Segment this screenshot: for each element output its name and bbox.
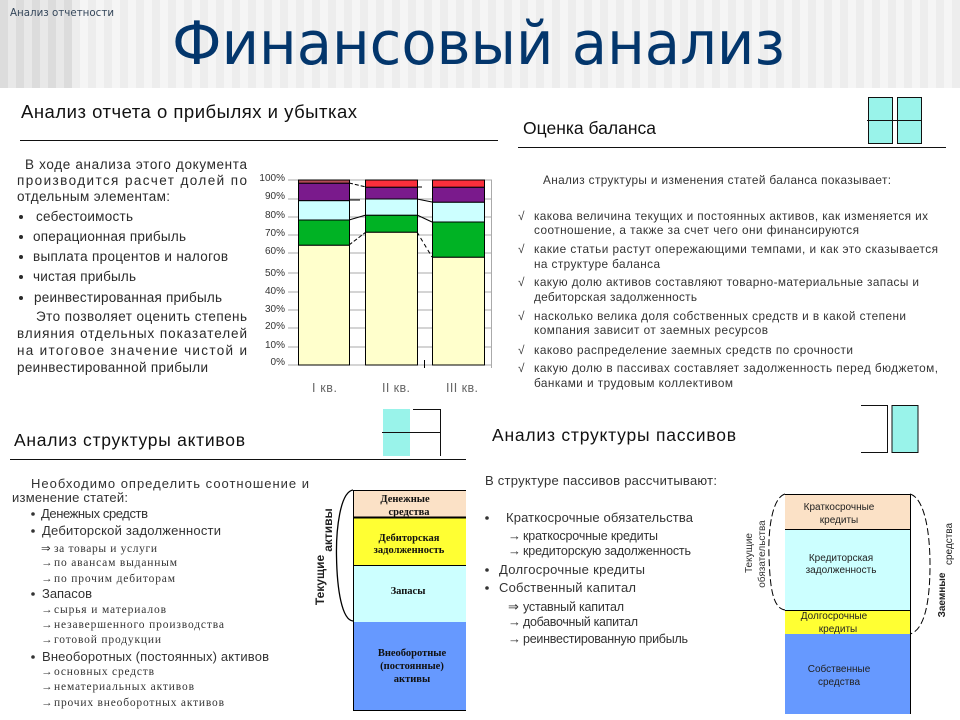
- asset stack labels: Дебиторская: [379, 533, 440, 544]
- text block: assets list: →: [41, 557, 52, 569]
- text block: assets list: Денежных средств: [41, 506, 148, 521]
- asset stack labels: (постоянные): [380, 661, 444, 672]
- rotated labels: current and borrowed: средства: [944, 523, 955, 565]
- liabilities stack labels: средства: [818, 677, 860, 688]
- text block: balance checklist: какую долю в пассивах составляет задолженность перед бюджетом,: [534, 361, 938, 375]
- panel: liabilities structure: [485, 406, 955, 714]
- liabilities stack labels: [801, 502, 876, 688]
- heading: income statement: Анализ отчета о прибылях и убытках: [21, 101, 358, 122]
- axis labels: 90%: [265, 191, 285, 202]
- liabilities stack labels: Долгосрочные: [801, 611, 868, 622]
- axis labels: 70%: [265, 228, 285, 239]
- text block: assets list: Необходимо определить соотношение и: [31, 476, 309, 491]
- text block: liabilities list: Долгосрочные кредиты: [499, 562, 645, 577]
- text block: assets list: →: [41, 634, 52, 646]
- asset stack labels: средства: [388, 507, 430, 518]
- asset stack labels: Внеоборотные: [378, 648, 447, 659]
- category labels: [312, 381, 478, 395]
- text block: balance checklist: [518, 173, 938, 390]
- text block: assets list: ⇒: [41, 543, 51, 555]
- text block: liabilities list: →: [508, 614, 521, 629]
- text block: assets list: →: [41, 573, 52, 585]
- liabilities stack labels: Краткосрочные: [804, 502, 875, 513]
- text block: balance checklist: какие статьи растут опережающими темпами, и как это сказывается: [534, 242, 938, 256]
- liabilities stack labels: кредиты: [819, 624, 857, 635]
- text block: assets list: Внеоборотных (постоянных) активов: [42, 649, 269, 664]
- title: Финансовый анализ: [172, 9, 785, 79]
- text block: liabilities list: ⇒: [508, 599, 519, 614]
- axis labels: 60%: [265, 246, 285, 257]
- text block: balance checklist: соотношение, а также за счет чего они финансируются: [534, 223, 859, 237]
- icon: liabilities cells: [861, 406, 918, 452]
- panel: income statement analysis: [17, 101, 498, 395]
- text block: balance checklist: √: [518, 343, 525, 357]
- liabilities stack labels: Кредиторская: [809, 553, 873, 564]
- text block: liabilities list: Краткосрочные обязательства: [506, 510, 694, 525]
- text block: assets list: [12, 476, 309, 709]
- asset stack labels: Денежные: [380, 494, 430, 505]
- axis labels: 40%: [265, 286, 285, 297]
- text block: liabilities list: Собственный капитал: [499, 580, 636, 595]
- axis labels: 100%: [259, 173, 285, 184]
- text block: liabilities list: кредиторскую задолженность: [523, 544, 691, 558]
- text block: income statement description: реинвестированной прибыли: [17, 360, 208, 375]
- axis labels: 50%: [265, 268, 285, 279]
- text block: assets list: прочих внеоборотных активов: [54, 697, 225, 709]
- bar: quarter 3: [432, 180, 484, 365]
- text block: liabilities list: В структуре пассивов рассчитывают:: [485, 473, 717, 488]
- text block: balance checklist: насколько велика доля собственных средств и в какой степени: [534, 309, 906, 323]
- panel: asset structure: [10, 409, 466, 710]
- diagram: liabilities stack: [744, 494, 955, 714]
- text block: assets list: нематериальных активов: [54, 681, 195, 693]
- text block: assets list: незавершенного производства: [54, 619, 224, 631]
- text block: assets list: →: [41, 604, 52, 616]
- category labels: I кв.: [312, 381, 337, 395]
- text block: liabilities list: реинвестированную прибыль: [523, 632, 688, 646]
- text block: assets list: →: [41, 619, 52, 631]
- text block: income statement description: [17, 157, 247, 375]
- text block: balance checklist: √: [518, 242, 525, 256]
- bar: quarter 1: [298, 180, 350, 365]
- asset stack labels: Запасы: [391, 586, 425, 597]
- category labels: II кв.: [382, 381, 410, 395]
- asset stack labels: [374, 494, 447, 685]
- axis labels: 10%: [265, 340, 285, 351]
- axis labels: [259, 173, 285, 368]
- text block: liabilities list: →: [508, 631, 521, 646]
- text block: liabilities list: →: [508, 543, 521, 558]
- text block: assets list: по авансам выданным: [54, 557, 178, 569]
- text block: income statement description: производится расчет долей по: [17, 173, 247, 188]
- rotated label: current assets: [313, 508, 335, 605]
- liabilities stack labels: Собственные: [808, 663, 871, 675]
- text block: balance checklist: какую долю активов составляют товарно-материальные запасы и: [534, 275, 919, 289]
- rotated labels: current and borrowed: обязательства: [756, 520, 768, 588]
- text block: assets list: →: [41, 666, 52, 678]
- text block: assets list: за товары и услуги: [54, 543, 157, 555]
- text block: liabilities list: добавочный капитал: [523, 615, 638, 629]
- icon: balance four cells: [867, 98, 922, 144]
- liabilities stack labels: кредиты: [820, 515, 858, 526]
- liabilities stack labels: задолженность: [806, 565, 876, 576]
- asset stack labels: задолженность: [374, 545, 445, 556]
- text block: assets list: →: [41, 681, 52, 693]
- text block: liabilities list: →: [508, 528, 521, 543]
- text block: income statement description: выплата процентов и налогов: [33, 249, 228, 264]
- breadcrumb: Анализ отчетности: [10, 7, 114, 19]
- text block: balance checklist: каково распределение заемных средств по срочности: [534, 343, 853, 357]
- text block: assets list: Дебиторской задолженности: [42, 523, 221, 538]
- text block: balance checklist: √: [518, 309, 525, 323]
- text block: income statement description: себестоимость: [36, 209, 133, 224]
- text block: liabilities list: [485, 473, 717, 646]
- text block: assets list: Запасов: [42, 586, 92, 601]
- axis labels: 20%: [265, 321, 285, 332]
- icon: assets cells: [382, 409, 441, 456]
- heading: balance: Оценка баланса: [523, 118, 656, 138]
- text block: assets list: по прочим дебиторам: [54, 573, 176, 585]
- text block: balance checklist: дебиторская задолженность: [534, 290, 697, 304]
- text block: balance checklist: Анализ структуры и изменения статей баланса показывает:: [543, 173, 891, 187]
- text block: assets list: изменение статей:: [12, 490, 128, 505]
- text block: income statement description: чистая прибыль: [33, 269, 136, 284]
- header band: [0, 0, 960, 88]
- text block: liabilities list: краткосрочные кредиты: [523, 529, 658, 543]
- text block: income statement description: влияния отдельных показателей: [17, 326, 247, 341]
- heading: assets: Анализ структуры активов: [14, 430, 245, 450]
- text block: balance checklist: √: [518, 209, 525, 223]
- asset stack labels: активы: [394, 674, 430, 685]
- text block: income statement description: на итоговое значение чистой и: [17, 343, 247, 358]
- text block: balance checklist: какова величина текущих и постоянных активов, как изменяется их: [534, 209, 928, 223]
- rotated label: current assets: Текущие: [313, 555, 327, 605]
- axis labels: 30%: [265, 304, 285, 315]
- text block: income statement description: реинвестированная прибыль: [34, 290, 222, 305]
- text block: assets list: основных средств: [54, 666, 155, 678]
- text block: balance checklist: компания зависит от заемных ресурсов: [534, 323, 768, 337]
- text block: income statement description: операционная прибыль: [33, 229, 186, 244]
- stacked bar chart: [259, 173, 492, 395]
- heading: liabilities: Анализ структуры пассивов: [492, 425, 736, 445]
- text block: assets list: сырья и материалов: [54, 604, 167, 616]
- text block: income statement description: отдельным элементам:: [17, 189, 170, 204]
- diagram: asset stack: [313, 490, 466, 710]
- text block: balance checklist: банками и трудовым коллективом: [534, 376, 733, 390]
- text block: balance checklist: √: [518, 275, 525, 289]
- axis labels: 0%: [271, 357, 285, 368]
- header band dark left stripes: [0, 0, 72, 88]
- text block: liabilities list: уставный капитал: [523, 600, 624, 614]
- text block: balance checklist: √: [518, 361, 525, 375]
- panel: balance assessment: [518, 98, 946, 390]
- rotated labels: current and borrowed: Заемные: [937, 572, 948, 617]
- text block: assets list: готовой продукции: [54, 634, 161, 646]
- bar: quarter 2: [366, 180, 418, 365]
- text block: income statement description: В ходе анализа этого документа: [25, 157, 247, 172]
- category labels: III кв.: [446, 381, 478, 395]
- text block: income statement description: Это позволяет оценить степень: [36, 309, 247, 324]
- rotated labels: current and borrowed: Текущие: [744, 533, 755, 573]
- text block: assets list: →: [41, 697, 52, 709]
- rotated labels: current and borrowed: [744, 520, 955, 617]
- text block: balance checklist: на структуре баланса: [534, 257, 660, 271]
- axis labels: 80%: [265, 210, 285, 221]
- rotated label: current assets: активы: [321, 508, 335, 552]
